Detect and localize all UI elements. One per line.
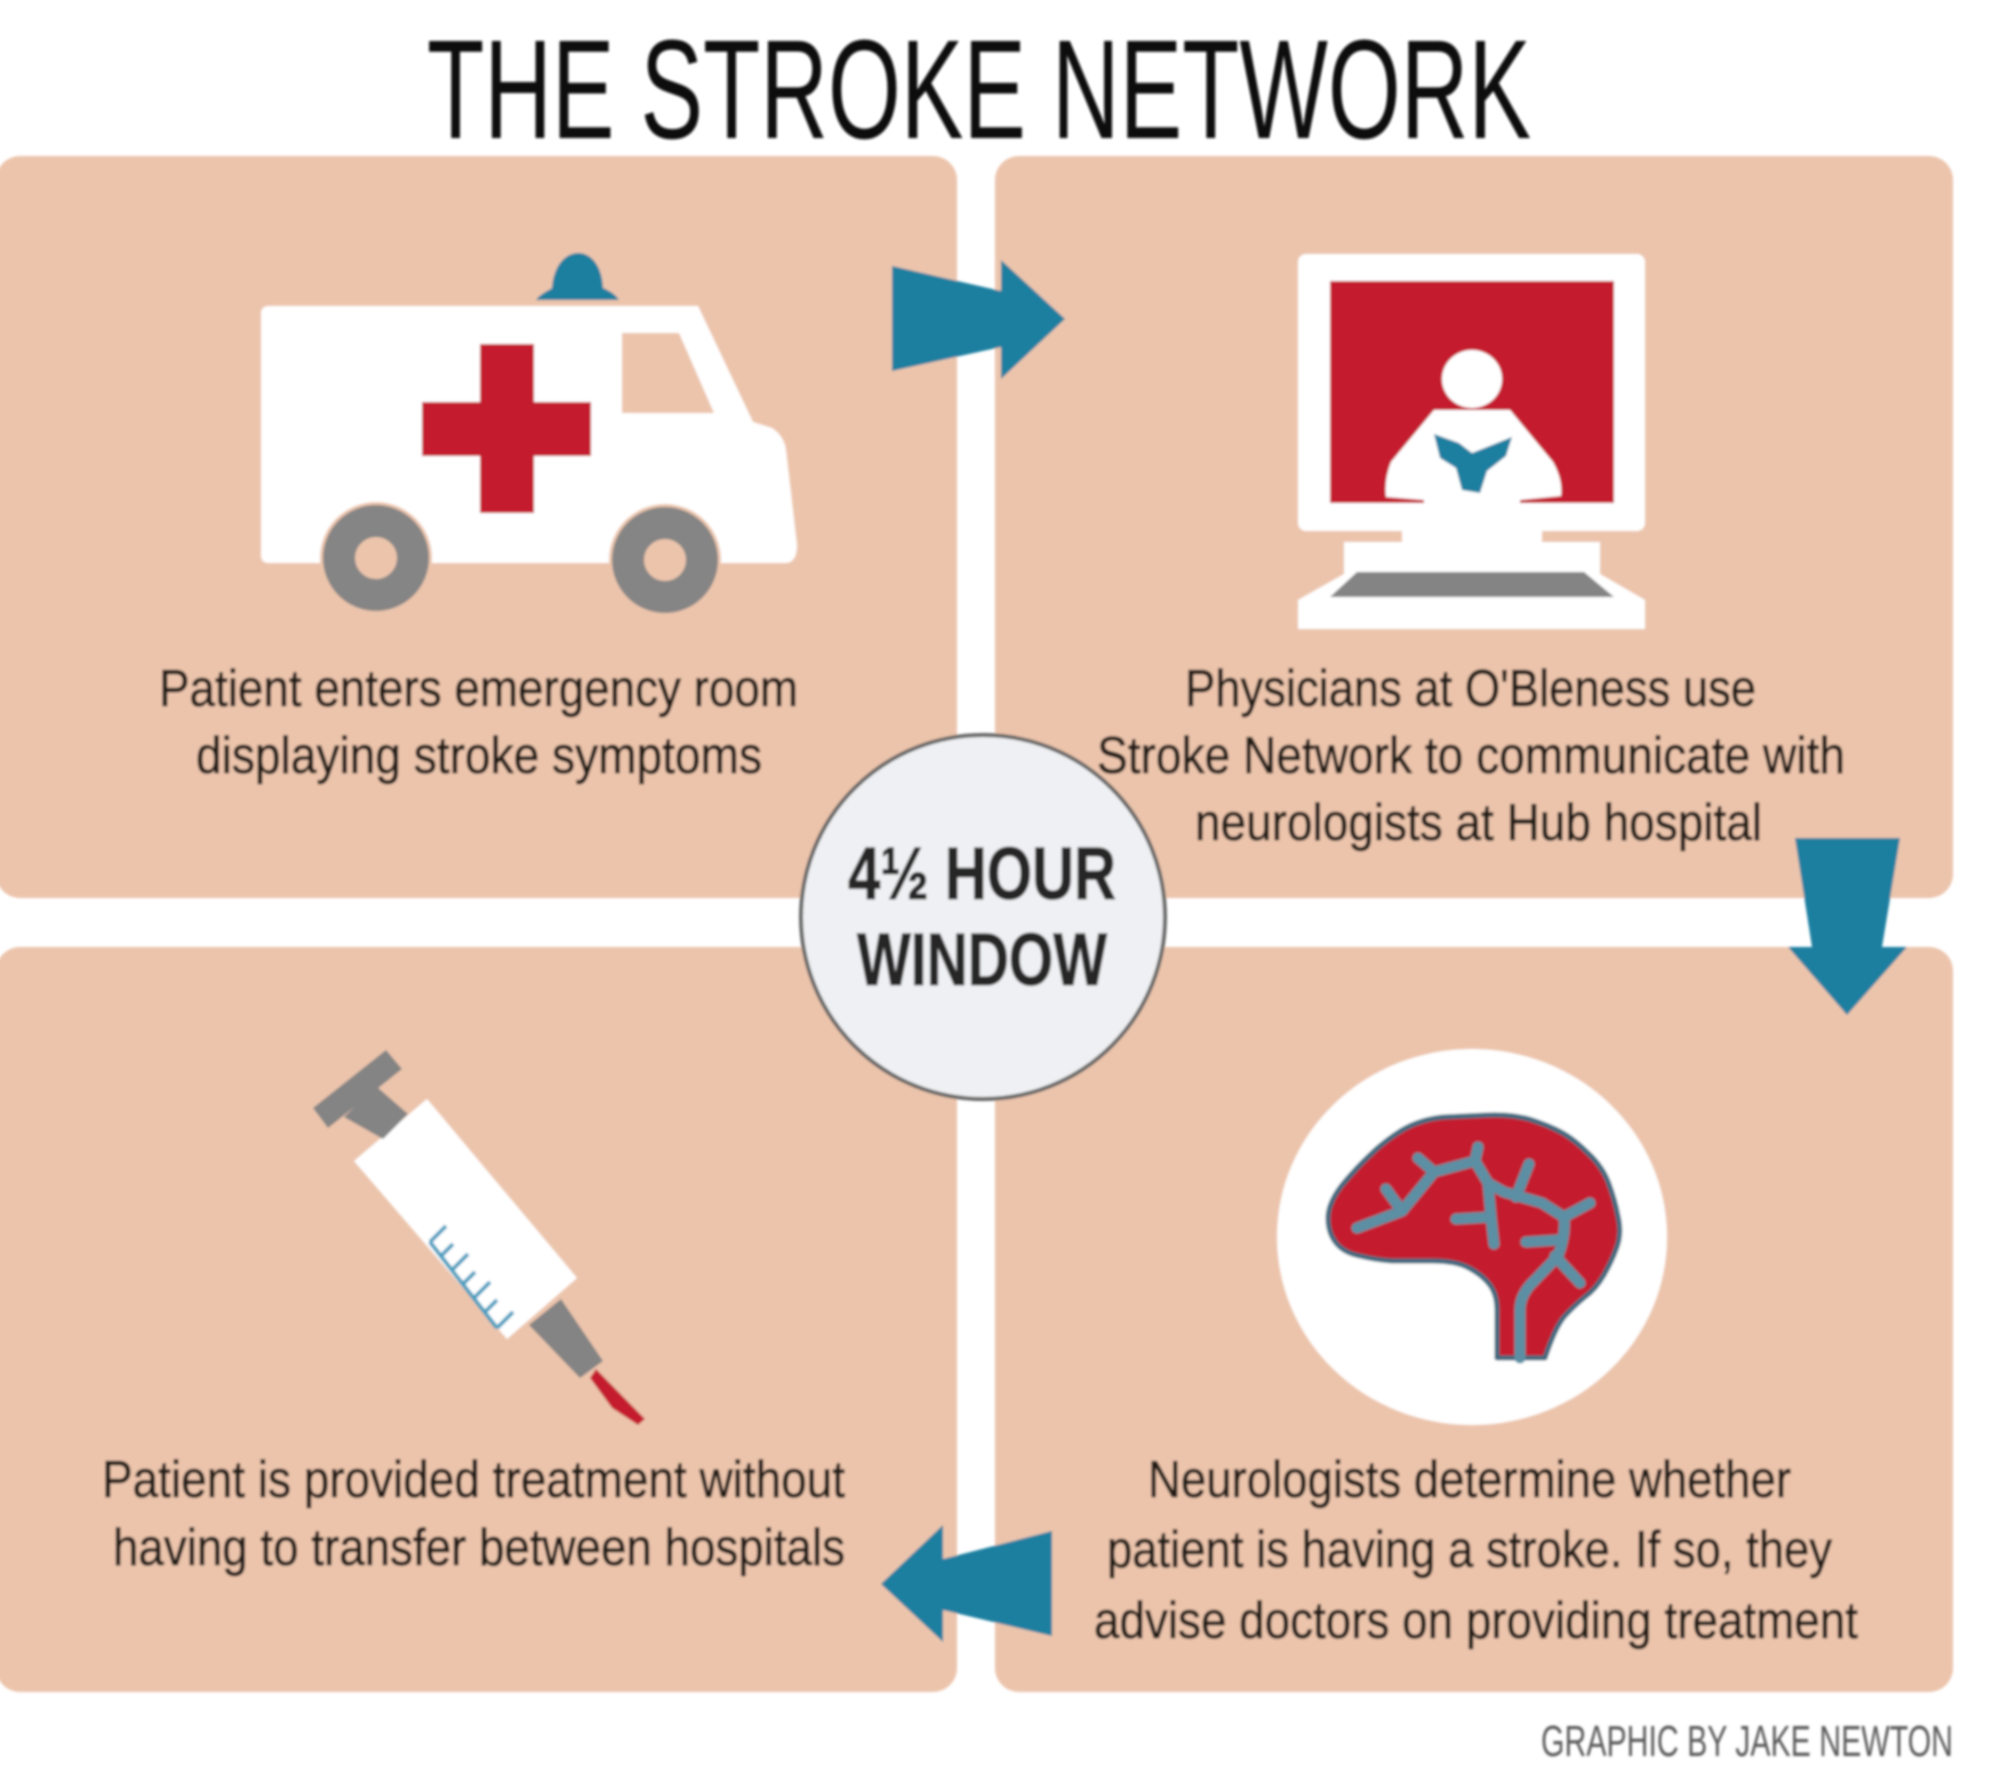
text: step 2 <box>1097 660 1845 852</box>
text: step 4 <box>102 1451 845 1577</box>
icon: computer with doctor <box>1298 254 1645 629</box>
icon: syringe <box>313 1050 645 1425</box>
text: step 3: patient is having a stroke. If so, they <box>1107 1521 1832 1579</box>
text: step 1: Patient enters emergency room <box>159 660 798 718</box>
text: step 3 <box>1094 1451 1858 1650</box>
callout: 4½ hour window: WINDOW <box>857 918 1107 1001</box>
text: step 1: displaying stroke symptoms <box>196 727 762 785</box>
icon: ambulance <box>261 253 797 616</box>
text: step 4: Patient is provided treatment without <box>102 1451 845 1509</box>
panel: physicians use stroke network <box>995 156 1953 898</box>
panel: patient provided treatment <box>0 947 957 1692</box>
text: step 2: Physicians at O'Bleness use <box>1185 660 1756 718</box>
arrow: right <box>892 260 1065 379</box>
text: step 4: having to transfer between hospitals <box>113 1519 845 1577</box>
panel: patient enters emergency room <box>0 156 957 898</box>
panel: neurologists determine <box>995 947 1953 1692</box>
arrow: down <box>1788 838 1907 1015</box>
text: step 3: Neurologists determine whether <box>1148 1451 1791 1509</box>
text: step 2: Stroke Network to communicate with <box>1097 727 1845 785</box>
text: step 1 <box>159 660 798 785</box>
callout: 4½ hour window <box>801 735 1165 1099</box>
icon: brain in white circle <box>1277 1049 1667 1425</box>
text: step 2: neurologists at Hub hospital <box>1195 794 1762 852</box>
text: step 3: advise doctors on providing treatment <box>1094 1592 1858 1650</box>
callout: 4½ hour window: 4½ HOUR <box>848 832 1116 915</box>
arrow: left <box>881 1525 1052 1642</box>
